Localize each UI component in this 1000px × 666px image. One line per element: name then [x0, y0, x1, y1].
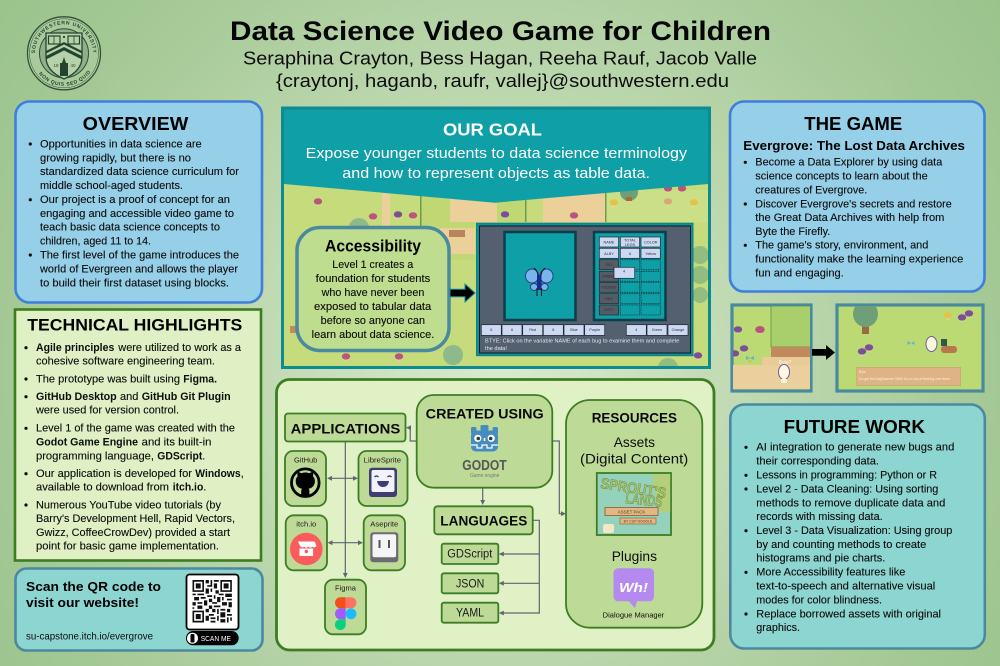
heading: technical highlights: TECHNICAL HIGHLIGHTS	[27, 317, 242, 335]
future work bullets: their corresponding data.	[756, 456, 879, 468]
icon: figma	[335, 597, 356, 630]
technical highlights bullets: Gwizz, CoffeeCrowDev) provided a start	[36, 527, 230, 539]
overview bullets: Our project is a proof of concept for an	[40, 194, 230, 206]
overview bullets: engaging and accessible video game to	[40, 208, 234, 220]
arrow: accessibility to game screen	[450, 284, 475, 302]
data table panel: ALBY	[604, 252, 614, 256]
data table panel: COLOR	[644, 240, 658, 244]
libresprite card	[358, 451, 408, 506]
draggable value blocks: Orange	[672, 328, 684, 332]
assets heading: (Digital Content)	[580, 450, 688, 466]
future work bullets: histograms and pie charts.	[756, 553, 885, 565]
technical highlights bullets: itch.io	[173, 482, 204, 494]
goal banner	[284, 110, 708, 203]
future work bullets: Level 2 - Data Cleaning: Using sorting	[756, 483, 938, 495]
draggable value blocks	[481, 325, 688, 335]
technical highlights bullets: available to download from	[36, 482, 169, 494]
technical highlights bullets: point for basic game implementation.	[36, 541, 219, 553]
created using box: CREATED USING	[426, 406, 544, 421]
icon: butterfly bug	[526, 268, 553, 296]
aseprite card: Aseprite	[370, 520, 398, 529]
future work bullets: Level 3 - Data Visualization: Using group	[756, 525, 952, 537]
languages label: LANGUAGES	[440, 514, 527, 529]
data table panel: SATY	[604, 308, 614, 312]
data table panel: EMBER	[602, 274, 616, 278]
technical highlights bullets: Level 1 of the game was created with the	[36, 423, 235, 435]
libresprite card: LibreSprite	[364, 455, 401, 464]
bug display panel	[504, 232, 576, 320]
future work bullets: methods to remove duplicate data and	[756, 497, 945, 509]
university seal logo	[26, 16, 102, 90]
github card: GitHub	[294, 455, 317, 464]
game screenshot: firefly dialogue	[837, 301, 983, 391]
panel: overview	[16, 102, 262, 302]
itch.io card: itch.io	[296, 520, 316, 529]
panel: created using diagram	[276, 380, 714, 650]
heading: overview: OVERVIEW	[83, 114, 188, 134]
draggable value blocks: 6	[511, 328, 513, 332]
website url: su-capstone.itch.io/evergrove	[26, 632, 154, 643]
callout: accessibility: learn about data science.	[312, 329, 434, 341]
technical highlights bullets: Our application is developed for	[36, 468, 192, 480]
technical highlights bullets: The prototype was built using	[36, 373, 180, 385]
resources box	[566, 400, 702, 628]
scan me badge	[186, 631, 239, 645]
QR heading	[26, 580, 161, 610]
draggable value blocks: Green	[652, 328, 662, 332]
goal statement: Expose younger students to data science terminology	[306, 145, 688, 162]
overview bullets: teach basic data science concepts to	[40, 222, 220, 234]
panel: QR code call to action	[16, 568, 262, 650]
technical highlights bullets: and its built-in	[142, 436, 211, 448]
figma card: Figma	[335, 584, 356, 593]
panel: the game	[730, 102, 984, 292]
yaml chip: YAML	[456, 608, 485, 620]
technical highlights bullets: were utilized to work as a	[117, 342, 241, 354]
draggable value blocks: 4	[635, 328, 637, 332]
technical highlights bullets: were used for version control.	[35, 405, 179, 417]
game bullets: fun and engaging.	[755, 268, 844, 280]
technical highlights bullets: .	[202, 450, 205, 462]
resources box: RESOURCES	[592, 410, 677, 425]
data table panel: Yellow	[645, 252, 656, 256]
data table panel: NAME	[604, 240, 615, 244]
game bullets: Discover Evergrove's secrets and restore	[755, 198, 952, 210]
game bullets: Become a Data Explorer by using data	[755, 157, 942, 169]
languages label	[434, 506, 533, 534]
future work bullets: Replace borrowed assets with original	[756, 608, 941, 620]
sprout lands asset pack image: BY CUP NOODLE	[624, 520, 653, 524]
future work bullets: AI integration to generate new bugs and	[756, 442, 954, 454]
future work bullets: modes for color blindness.	[756, 594, 882, 606]
panel: future work	[730, 404, 985, 648]
json chip: JSON	[456, 578, 484, 590]
game screenshot: byte meets player	[731, 305, 811, 391]
authors: Seraphina Crayton, Bess Hagan, Reeha Rauf, Jacob Valle	[243, 48, 757, 68]
game bullets: functionality make the learning experience	[755, 254, 963, 266]
game bullets: Byte the Firefly.	[755, 226, 830, 238]
university seal logo: SOUTHWESTERN UNIVERSITY	[32, 20, 96, 54]
callout: accessibility: exposed to tabular data	[314, 301, 431, 313]
game dialogue text: BTYE: Click on the variable NAME of each bug to examine them and complete	[485, 338, 679, 344]
university seal logo: 40	[70, 63, 76, 68]
figma card	[325, 580, 366, 634]
callout: accessibility: Accessibility	[325, 237, 421, 256]
callout: accessibility: before so anyone can	[321, 315, 425, 327]
github card	[285, 451, 326, 506]
overview bullets: middle school-aged students.	[40, 180, 183, 192]
game screenshot: data table level	[476, 223, 693, 356]
dialogue box: Byte	[859, 370, 866, 374]
game dialogue text	[485, 338, 679, 352]
technical highlights bullets: Godot Game Engine	[36, 436, 138, 448]
sprout lands asset pack image: LANDS	[625, 490, 663, 511]
icon: godot logo	[471, 425, 498, 452]
future work bullets	[744, 442, 954, 634]
technical highlights bullets: GDScript	[157, 450, 203, 462]
overview bullets	[29, 138, 239, 289]
dialogue box	[857, 367, 961, 386]
technical highlights bullets	[24, 342, 244, 553]
future work bullets: text-to-speech and alternative visual	[756, 580, 935, 592]
heading: future work: FUTURE WORK	[784, 417, 925, 437]
draggable value blocks: 8	[552, 328, 554, 332]
goal statement	[306, 145, 688, 182]
arrows: diagram connectors	[327, 425, 566, 615]
icon: github	[292, 469, 319, 497]
icon: itch.io	[290, 533, 323, 565]
title: Data Science Video Game for Children	[230, 16, 771, 46]
gdscript chip	[442, 544, 498, 564]
itch.io card	[286, 515, 327, 570]
technical highlights bullets: cohesive software engineering team.	[36, 356, 215, 368]
data table panel: 4	[623, 270, 625, 274]
overview bullets: The first level of the game introduces the	[40, 249, 239, 261]
technical highlights bullets: Windows	[195, 468, 241, 480]
callout: accessibility	[297, 228, 449, 350]
QR heading: visit our website!	[26, 596, 139, 610]
json chip	[442, 573, 498, 593]
data table panel: HEX	[605, 297, 613, 301]
yaml chip	[442, 603, 498, 623]
technical highlights bullets: programming language,	[36, 450, 154, 462]
heading: the game: THE GAME	[804, 114, 902, 134]
icon: libresprite	[369, 468, 397, 497]
overview bullets: children, aged 11 to 14.	[40, 236, 151, 248]
goal statement: and how to represent objects as table data.	[342, 165, 650, 182]
godot wordmark: GODOT	[462, 458, 507, 474]
sprout lands asset pack image: ASSET PACK	[618, 510, 645, 514]
game bullets	[744, 157, 963, 280]
gdscript chip: GDScript	[447, 549, 493, 561]
data table panel: LEGS	[625, 243, 636, 247]
technical highlights bullets: Barry's Development Hell, Rapid Vectors,	[36, 513, 235, 525]
overview bullets: to build their first dataset using blocks.	[40, 277, 229, 289]
panel: our goal	[282, 108, 710, 378]
future work bullets: More Accessibility features like	[756, 567, 905, 579]
plugins heading: Plugins	[612, 548, 657, 564]
data table panel: FIZZGIG	[602, 286, 617, 290]
game screenshot: byte meets player: Byte?	[779, 360, 792, 366]
icon: dialogue manager plugin: Wh!	[619, 580, 649, 595]
assets heading: Assets	[614, 434, 655, 450]
game bullets: the Great Data Archives with help from	[755, 212, 944, 224]
arrow: between screenshots	[812, 345, 835, 360]
data table panel	[594, 232, 666, 320]
sprout lands asset pack image: SPROUT'S	[599, 475, 667, 502]
draggable value blocks: Blue	[570, 328, 578, 332]
future work bullets: Lessons in programming: Python or R	[756, 470, 937, 482]
draggable value blocks: 6	[490, 328, 492, 332]
aseprite card	[364, 515, 405, 570]
dialogue manager label: Dialogue Manager	[603, 610, 665, 619]
icon: dialogue manager plugin	[614, 568, 654, 608]
applications label: APPLICATIONS	[291, 421, 400, 436]
icon: aseprite	[370, 532, 398, 562]
godot tagline: Game engine	[470, 473, 499, 479]
game dialogue text: the data!	[485, 346, 507, 352]
sprout lands asset pack image	[597, 473, 671, 535]
future work bullets: graphics.	[756, 622, 800, 634]
draggable value blocks: Red	[529, 328, 536, 332]
panel: technical highlights	[15, 310, 261, 560]
technical highlights bullets: Agile principles	[36, 342, 114, 354]
technical highlights bullets: Figma.	[183, 373, 217, 385]
applications label	[285, 414, 406, 442]
game bullets: The game's story, environment, and	[755, 240, 928, 252]
callout: accessibility: foundation for students	[316, 273, 430, 285]
game bullets: creatures of Evergrove.	[755, 184, 867, 196]
future work bullets: records with missing data.	[756, 511, 883, 523]
technical highlights bullets: .	[203, 482, 206, 494]
technical highlights bullets: and	[120, 391, 138, 403]
overview bullets: growing rapidly, but there is no	[40, 152, 191, 164]
data table panel: 6	[629, 252, 631, 256]
data table panel: TOTAL	[624, 238, 636, 242]
heading: our goal: OUR GOAL	[443, 120, 542, 140]
scan me badge: SCAN ME	[201, 636, 231, 643]
dialogue box: Go get the BugScanner 3000! It's on top of that log over there.	[859, 377, 951, 381]
future work bullets: by and counting methods to create	[756, 539, 926, 551]
created using box	[417, 395, 552, 488]
overview bullets: standardized data science curriculum for	[40, 166, 239, 178]
technical highlights bullets: GitHub Git Plugin	[142, 391, 231, 403]
overview bullets: world of Evergreen and allows the player	[39, 263, 238, 275]
assets heading	[580, 434, 688, 466]
university seal logo: NON QUIS SED QUID	[39, 70, 90, 86]
callout: accessibility: Level 1 creates a	[332, 259, 413, 271]
contact emails: {craytonj, haganb, raufr, vallej}@southwestern.edu	[276, 70, 729, 91]
QR heading: Scan the QR code to	[26, 580, 161, 594]
technical highlights bullets: Numerous YouTube video tutorials (by	[36, 499, 222, 511]
game bullets: science concepts to learn about the	[755, 171, 928, 183]
overview bullets: Opportunities in data science are	[40, 138, 202, 150]
data table panel: BO	[606, 263, 612, 267]
university seal logo: 18	[53, 63, 59, 68]
technical highlights bullets: ,	[241, 468, 244, 480]
QR code	[186, 574, 238, 630]
game map background	[290, 183, 709, 378]
draggable value blocks: Purple	[589, 328, 600, 332]
technical highlights bullets: GitHub Desktop	[36, 391, 117, 403]
callout: accessibility: who have never been	[321, 287, 424, 299]
subtitle: game name: Evergrove: The Lost Data Archives	[743, 138, 965, 153]
